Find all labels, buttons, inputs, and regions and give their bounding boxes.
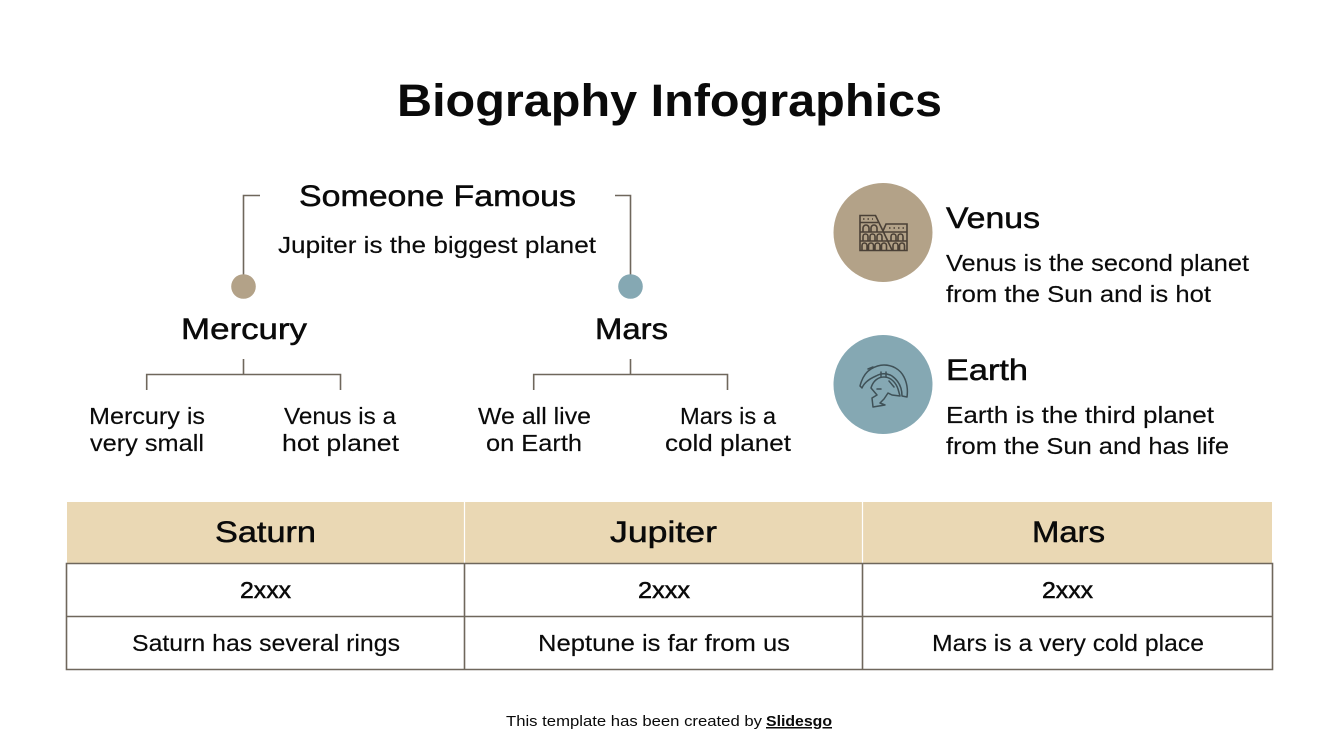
- text: venus is a hot planet: hot planet: [282, 430, 400, 456]
- footer credit: Slidesgo: [766, 713, 832, 730]
- text: venus is a hot planet: Venus is a: [284, 403, 396, 429]
- heading: someone famous: Someone Famous: [299, 180, 576, 213]
- text: mars is a cold planet: [665, 403, 792, 456]
- text: we all live on earth: We all live: [478, 403, 591, 429]
- panel: venus: [834, 183, 1250, 307]
- panel: family tree: [89, 180, 792, 456]
- table row: dates: 2xxx: [240, 577, 292, 603]
- table: [66, 502, 1272, 670]
- table header: Mars: [1032, 516, 1105, 549]
- heading: mars: Mars: [595, 313, 668, 346]
- footer credit: This template has been created by: [506, 713, 763, 730]
- icon: colosseum: [834, 183, 932, 282]
- text: mars is a cold planet: Mars is a: [680, 403, 776, 429]
- text: subtitle: Jupiter is the biggest planet: [278, 232, 597, 258]
- text: venus is a hot planet: [282, 403, 400, 456]
- heading: mercury: Mercury: [181, 313, 307, 346]
- table row: dates: 2xxx: [638, 577, 691, 603]
- text: mercury is very small: [89, 403, 205, 456]
- table row: descriptions: Saturn has several rings: [132, 630, 400, 656]
- text: venus description: Venus is the second planet: [946, 250, 1250, 276]
- connector: left bracket: [244, 196, 260, 275]
- title: Biography Infographics: [397, 75, 942, 126]
- table header: [67, 502, 1272, 563]
- table row: descriptions: Mars is a very cold place: [932, 630, 1204, 656]
- table header: Saturn: [215, 516, 316, 549]
- table header: Jupiter: [610, 516, 717, 549]
- heading: venus: Venus: [946, 202, 1040, 235]
- text: mercury is very small: Mercury is: [89, 403, 205, 429]
- table row: dates: [240, 577, 1094, 603]
- text: earth description: from the Sun and has life: [946, 433, 1229, 459]
- text: earth description: [946, 402, 1229, 459]
- table grid: [66, 564, 1272, 670]
- connector: right bracket: [615, 196, 630, 275]
- text: venus description: [946, 250, 1250, 307]
- panel: earth: [834, 335, 1229, 459]
- heading: earth: Earth: [946, 354, 1028, 387]
- text: we all live on earth: [478, 403, 591, 456]
- node: tan dot: [231, 274, 256, 299]
- node: blue dot: [618, 274, 643, 299]
- text: we all live on earth: on Earth: [486, 430, 582, 456]
- text: venus description: from the Sun and is hot: [946, 281, 1212, 307]
- text: mercury is very small: very small: [90, 430, 204, 456]
- table row: dates: 2xxx: [1042, 577, 1094, 603]
- connector: mercury branches: [147, 359, 340, 390]
- icon: helmet: [834, 335, 932, 434]
- table row: descriptions: [132, 630, 1204, 656]
- text: earth description: Earth is the third planet: [946, 402, 1215, 428]
- connector: mars branches: [534, 359, 728, 390]
- table row: descriptions: Neptune is far from us: [538, 630, 790, 656]
- text: mars is a cold planet: cold planet: [665, 430, 792, 456]
